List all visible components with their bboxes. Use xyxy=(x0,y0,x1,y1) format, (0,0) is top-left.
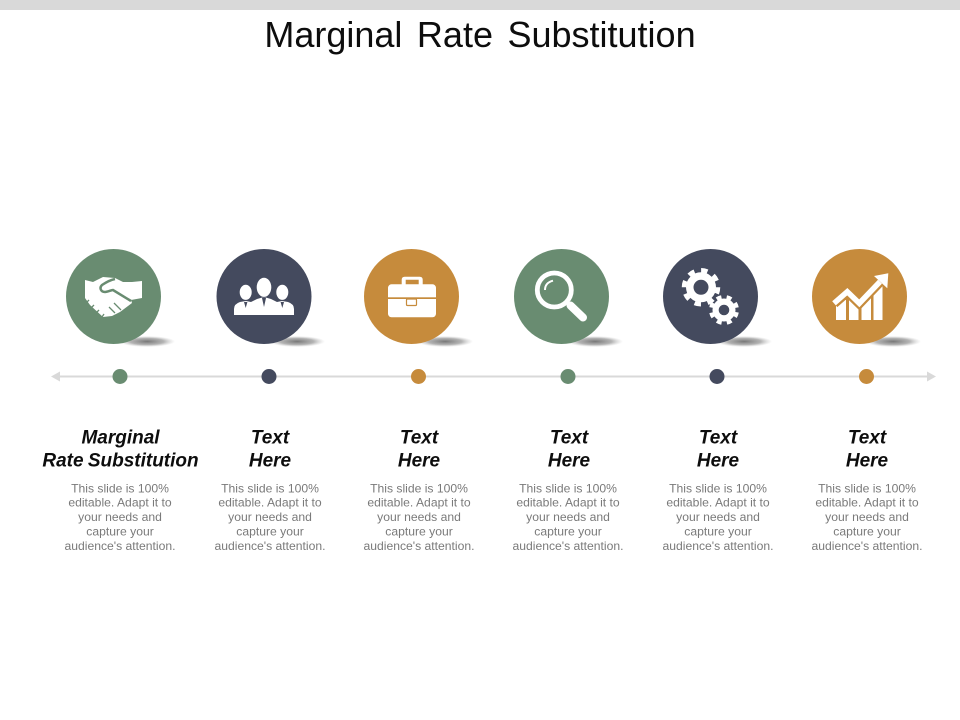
text block 3: your needs and xyxy=(377,510,461,524)
text block 1: This slide is 100% xyxy=(71,482,169,496)
text block 1: editable. Adapt it to xyxy=(68,496,172,510)
text block 2: Text xyxy=(251,428,290,448)
text block 4: Here xyxy=(548,450,591,472)
step 4: magnifier circle xyxy=(514,249,623,384)
icon: growth chart xyxy=(834,273,888,320)
text block 2: editable. Adapt it to xyxy=(218,496,322,510)
text block 2: capture your xyxy=(236,524,304,538)
text block 1: audience's attention. xyxy=(64,539,176,553)
text block 6: editable. Adapt it to xyxy=(815,496,919,510)
text block 5: Here xyxy=(697,450,740,472)
text block 2: Here xyxy=(249,450,292,472)
text block 6: This slide is 100% xyxy=(818,482,916,496)
text block 4: audience's attention. xyxy=(512,539,624,553)
timeline arrow xyxy=(51,372,936,382)
text block 6: capture your xyxy=(833,524,901,538)
text block 5: This slide is 100% xyxy=(669,482,767,496)
icon: handshake xyxy=(85,277,142,317)
text block 3: editable. Adapt it to xyxy=(367,496,471,510)
dot xyxy=(411,369,426,384)
top bar xyxy=(0,0,960,10)
text block 2: your needs and xyxy=(228,510,312,524)
text block 6: Text xyxy=(848,428,887,448)
text block 5: capture your xyxy=(684,524,752,538)
step 6: growth chart circle xyxy=(812,249,921,384)
text block 4 xyxy=(512,428,624,553)
text block 1 xyxy=(42,428,199,553)
step 5: gears circle xyxy=(663,249,772,384)
dot xyxy=(710,369,724,384)
text block 5: editable. Adapt it to xyxy=(666,496,770,510)
text block 1: Marginal xyxy=(81,428,160,448)
text block 3: audience's attention. xyxy=(364,539,474,553)
icon: briefcase xyxy=(388,277,436,317)
text block 3: This slide is 100% xyxy=(370,482,468,496)
text block 4: Text xyxy=(550,428,589,448)
text block 6: your needs and xyxy=(825,510,909,524)
step 3: briefcase circle xyxy=(364,249,473,384)
dot xyxy=(112,369,128,384)
text block 5 xyxy=(662,428,774,553)
text block 4: This slide is 100% xyxy=(519,482,617,496)
text block 4: capture your xyxy=(534,524,602,538)
text block 3: capture your xyxy=(385,524,453,538)
text block 1: Rate Substitution xyxy=(42,450,199,472)
text block 4: editable. Adapt it to xyxy=(516,496,620,510)
step 1: handshake circle xyxy=(66,249,175,384)
text block 5: Text xyxy=(699,428,738,448)
text block 2: This slide is 100% xyxy=(221,482,319,496)
dot xyxy=(859,369,874,384)
text block 6: Here xyxy=(846,450,889,472)
text block 1: capture your xyxy=(86,524,154,538)
text block 6: audience's attention. xyxy=(812,539,922,553)
text block 1: your needs and xyxy=(78,510,162,524)
icon: team xyxy=(234,277,294,315)
icon: gears xyxy=(684,270,739,325)
icon: magnifier xyxy=(537,273,583,318)
text block 5: your needs and xyxy=(676,510,760,524)
text block 3: Here xyxy=(398,450,441,472)
text block 3: Text xyxy=(400,428,439,448)
dot xyxy=(560,369,576,384)
text block 2 xyxy=(214,428,326,553)
text block 6 xyxy=(812,428,922,553)
step 2: team circle xyxy=(216,249,325,384)
text block 2: audience's attention. xyxy=(214,539,326,553)
text block 4: your needs and xyxy=(526,510,610,524)
text block 3 xyxy=(364,428,474,553)
title: Marginal Rate Substitution xyxy=(264,14,696,55)
text block 5: audience's attention. xyxy=(662,539,774,553)
dot xyxy=(262,369,276,384)
